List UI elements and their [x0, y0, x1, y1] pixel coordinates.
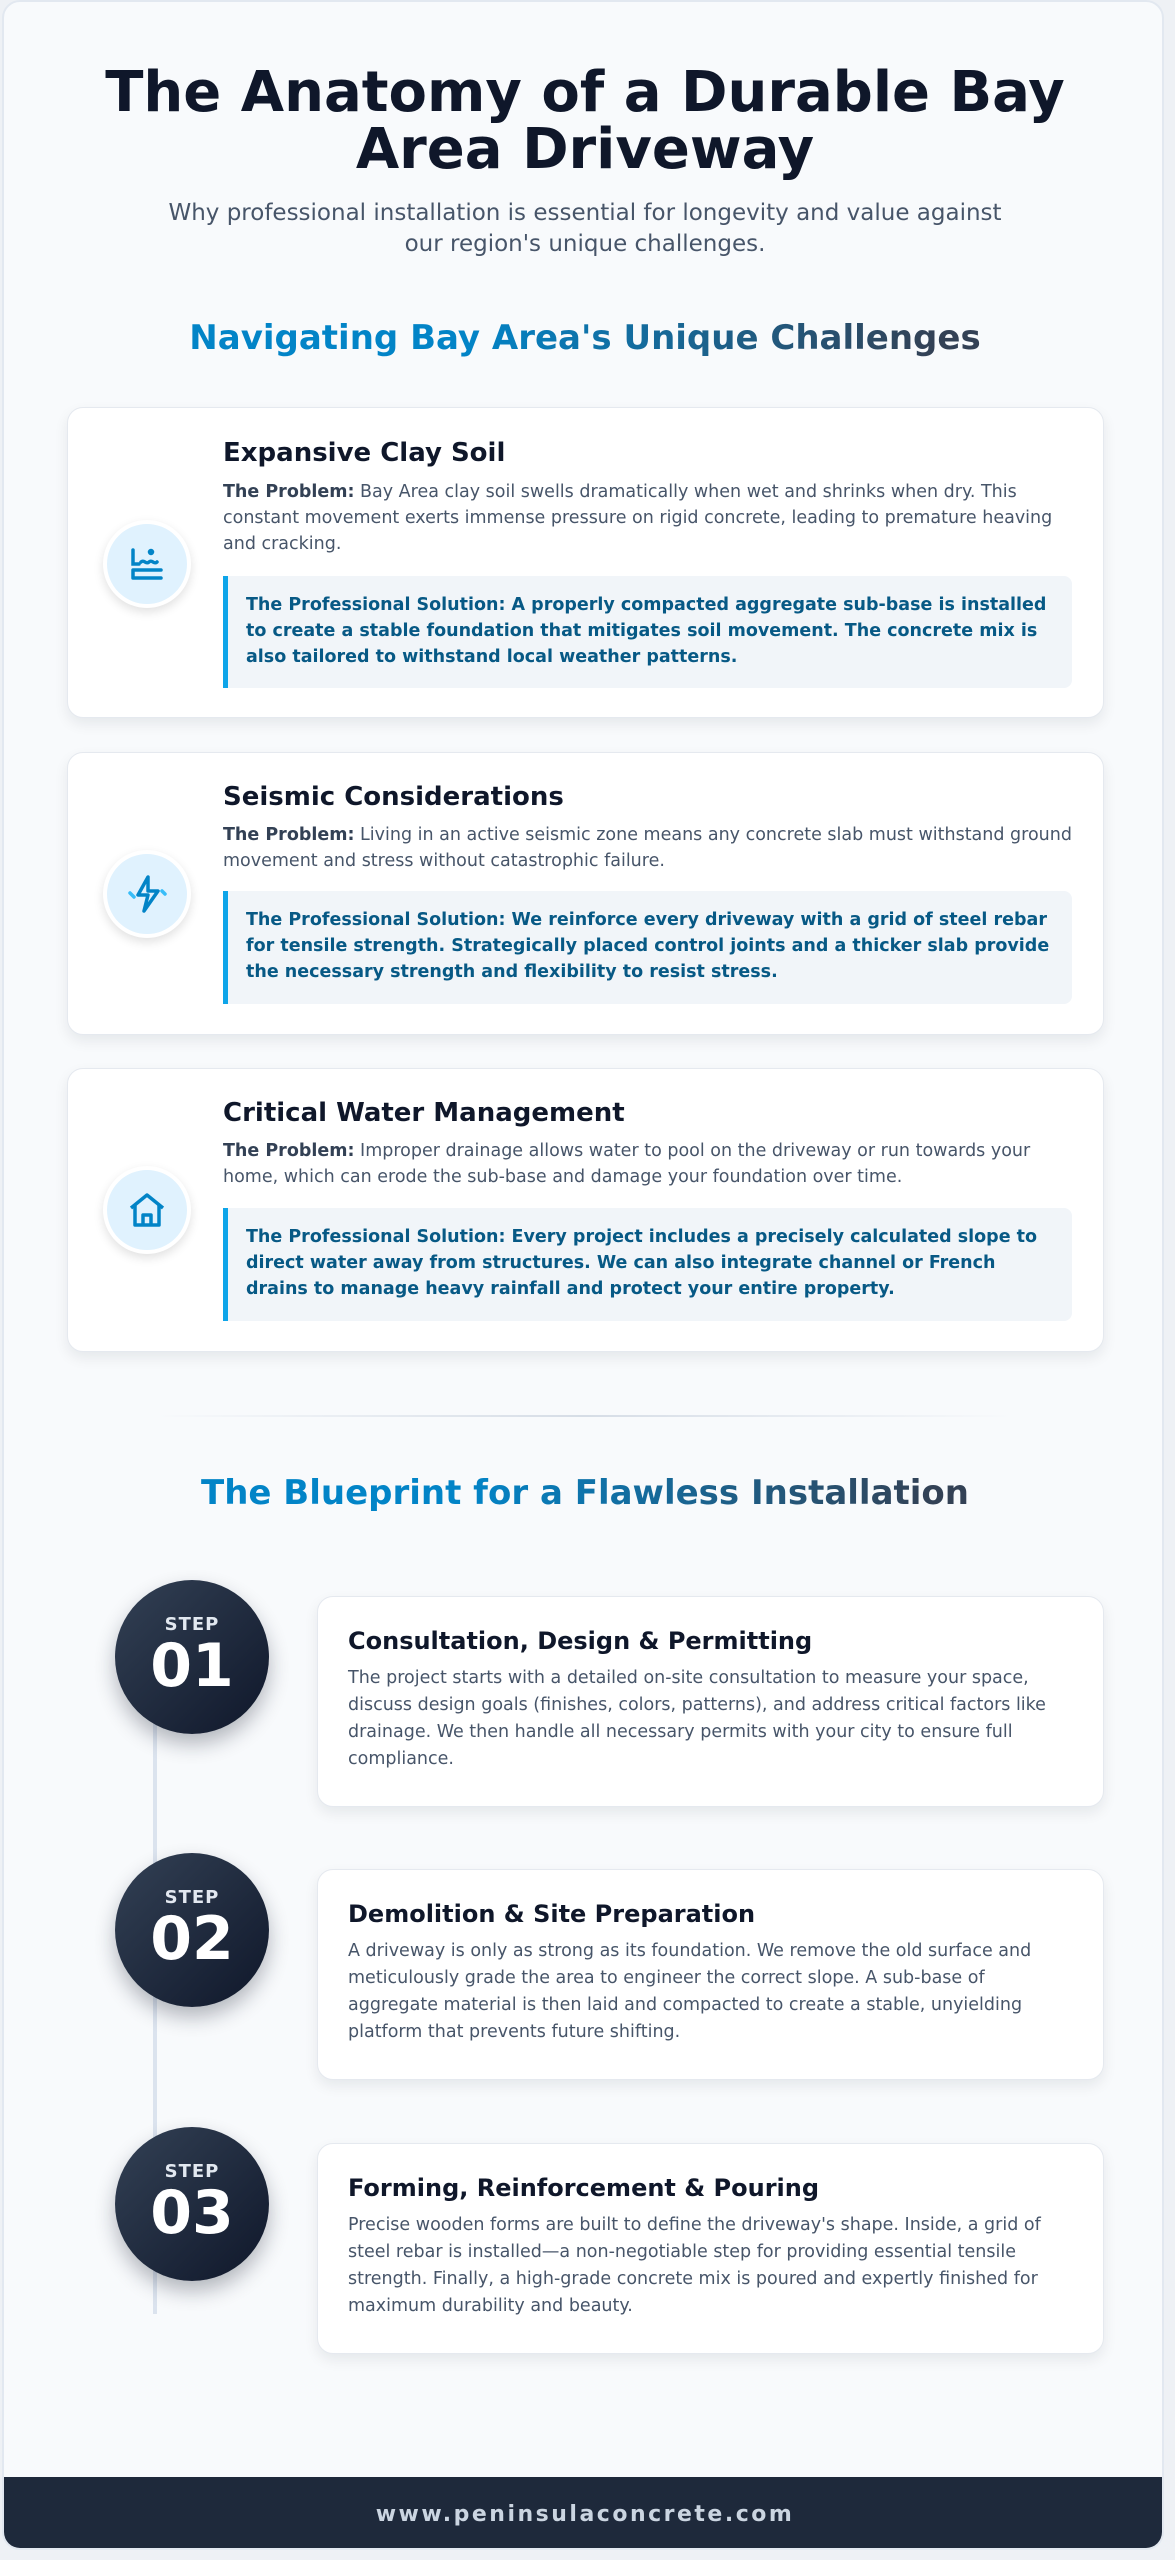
solution callout: The Professional Solution: We reinforce every driveway with a grid of steel rebar for tensile strength. Strategically placed control joints and a thicker slab provide the necessary strength and flexibility to resist stress.	[246, 910, 1049, 982]
step 2 card	[317, 1869, 1104, 2080]
problem text: The Problem: Bay Area clay soil swells dramatically when wet and shrinks when dry. This constant movement exerts immense pressure on rigid concrete, leading to premature heaving and cracking.	[223, 482, 1052, 554]
heading: Seismic Considerations	[223, 782, 564, 812]
step 3 card	[317, 2143, 1104, 2354]
step 3 card: Precise wooden forms are built to define the driveway's shape. Inside, a grid of steel rebar is installed—a non-negotiable step for providing essential tensile strength. Finally, a high-grade concrete mix is poured and expertly finished for maximum durability and beauty.	[348, 2215, 1041, 2316]
panel: water management	[67, 1068, 1104, 1352]
heading: blueprint	[4, 1473, 1166, 1513]
timeline line	[153, 1662, 157, 2314]
step 1 card: Consultation, Design & Permitting	[348, 1627, 812, 1655]
step 1 badge	[115, 1580, 269, 1734]
footer	[4, 2477, 1166, 2552]
step 3 card: Forming, Reinforcement & Pouring	[348, 2174, 819, 2202]
solution callout	[223, 1208, 1072, 1321]
icon: house	[103, 1166, 191, 1254]
title: The Anatomy of a Durable Bay	[105, 60, 1065, 125]
step 2 badge: STEP	[165, 1887, 219, 1908]
heading: Expansive Clay Soil	[223, 438, 505, 468]
step 2 card: A driveway is only as strong as its foundation. We remove the old surface and meticulously grade the area to engineer the correct slope. A sub-base of aggregate material is then laid and compacted to create a stable, unyielding platform that prevents future shifting.	[348, 1941, 1031, 2042]
solution callout	[223, 576, 1072, 688]
step 1 badge: 01	[150, 1631, 234, 1701]
step 3 badge: STEP	[165, 2161, 219, 2182]
heading: Critical Water Management	[223, 1098, 625, 1128]
heading: blueprint: The Blueprint for a Flawless Installation	[201, 1473, 969, 1513]
solution callout	[223, 891, 1072, 1004]
step 1 card: The project starts with a detailed on-site consultation to measure your space, discuss design goals (finishes, colors, patterns), and address critical factors like drainage. We then handle all necessary permits with your city to ensure full compliance.	[348, 1668, 1046, 1769]
footer: www.peninsulaconcrete.com	[376, 2502, 794, 2527]
panel: expansive clay soil	[67, 407, 1104, 718]
step 3 badge: 03	[150, 2178, 234, 2248]
icon: soil layers	[103, 520, 191, 608]
title	[105, 60, 1065, 182]
step 3 badge	[115, 2127, 269, 2281]
solution callout: The Professional Solution: Every project includes a precisely calculated slope to direct water away from structures. We can also integrate channel or French drains to manage heavy rainfall and protect your entire property.	[246, 1227, 1037, 1299]
title: Area Driveway	[356, 117, 814, 182]
problem text: The Problem: Improper drainage allows water to pool on the driveway or run towards your home, which can erode the sub-base and damage your foundation over time.	[223, 1141, 1030, 1187]
step 2 badge: 02	[150, 1904, 234, 1974]
icon: lightning	[103, 850, 191, 938]
problem text: The Problem: Living in an active seismic zone means any concrete slab must withstand ground movement and stress without catastrophic failure.	[223, 825, 1072, 871]
heading: challenges	[4, 318, 1166, 358]
panel: seismic	[67, 752, 1104, 1035]
step 2 card: Demolition & Site Preparation	[348, 1900, 755, 1928]
heading: challenges: Navigating Bay Area's Unique Challenges	[189, 318, 981, 358]
step 1 badge: STEP	[165, 1614, 219, 1635]
subtitle: Why professional installation is essential for longevity and value against our region's unique challenges.	[168, 200, 1002, 257]
solution callout: The Professional Solution: A properly compacted aggregate sub-base is installed to create a stable foundation that mitigates soil movement. The concrete mix is also tailored to withstand local weather patterns.	[246, 595, 1046, 667]
step 2 badge	[115, 1853, 269, 2007]
step 1 card	[317, 1596, 1104, 1807]
